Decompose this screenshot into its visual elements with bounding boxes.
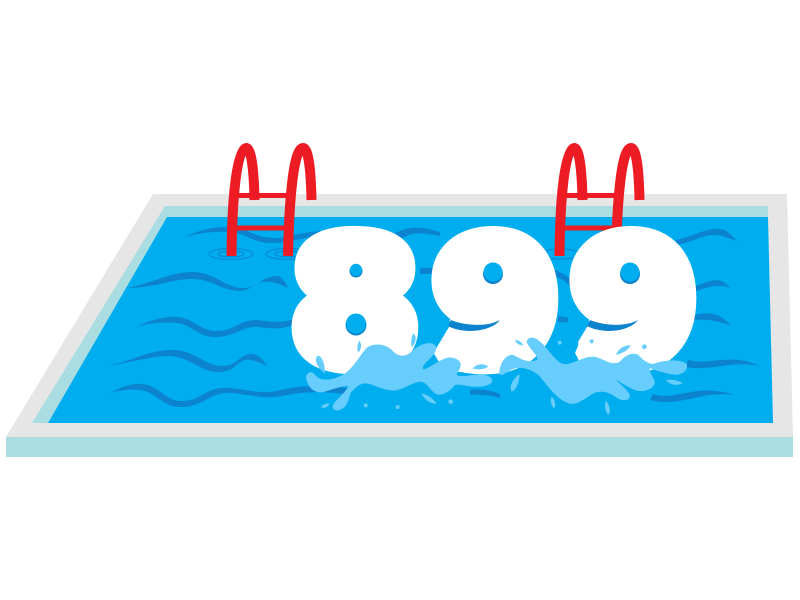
pool front face — [6, 437, 793, 457]
number 899 — [291, 204, 697, 403]
ladder ripples — [209, 248, 580, 260]
ladder: right — [560, 148, 640, 256]
water — [48, 217, 773, 423]
water waves — [106, 227, 760, 407]
pool inner wall — [32, 206, 768, 423]
digit 8: 8 — [291, 204, 419, 402]
digit 9: 9 — [571, 205, 697, 403]
pool — [6, 194, 793, 457]
digit 9: 9 — [433, 205, 559, 403]
pool deck — [6, 194, 793, 437]
water splash: left — [306, 333, 492, 410]
water splash: right — [499, 338, 687, 415]
ladder: left — [232, 148, 312, 256]
